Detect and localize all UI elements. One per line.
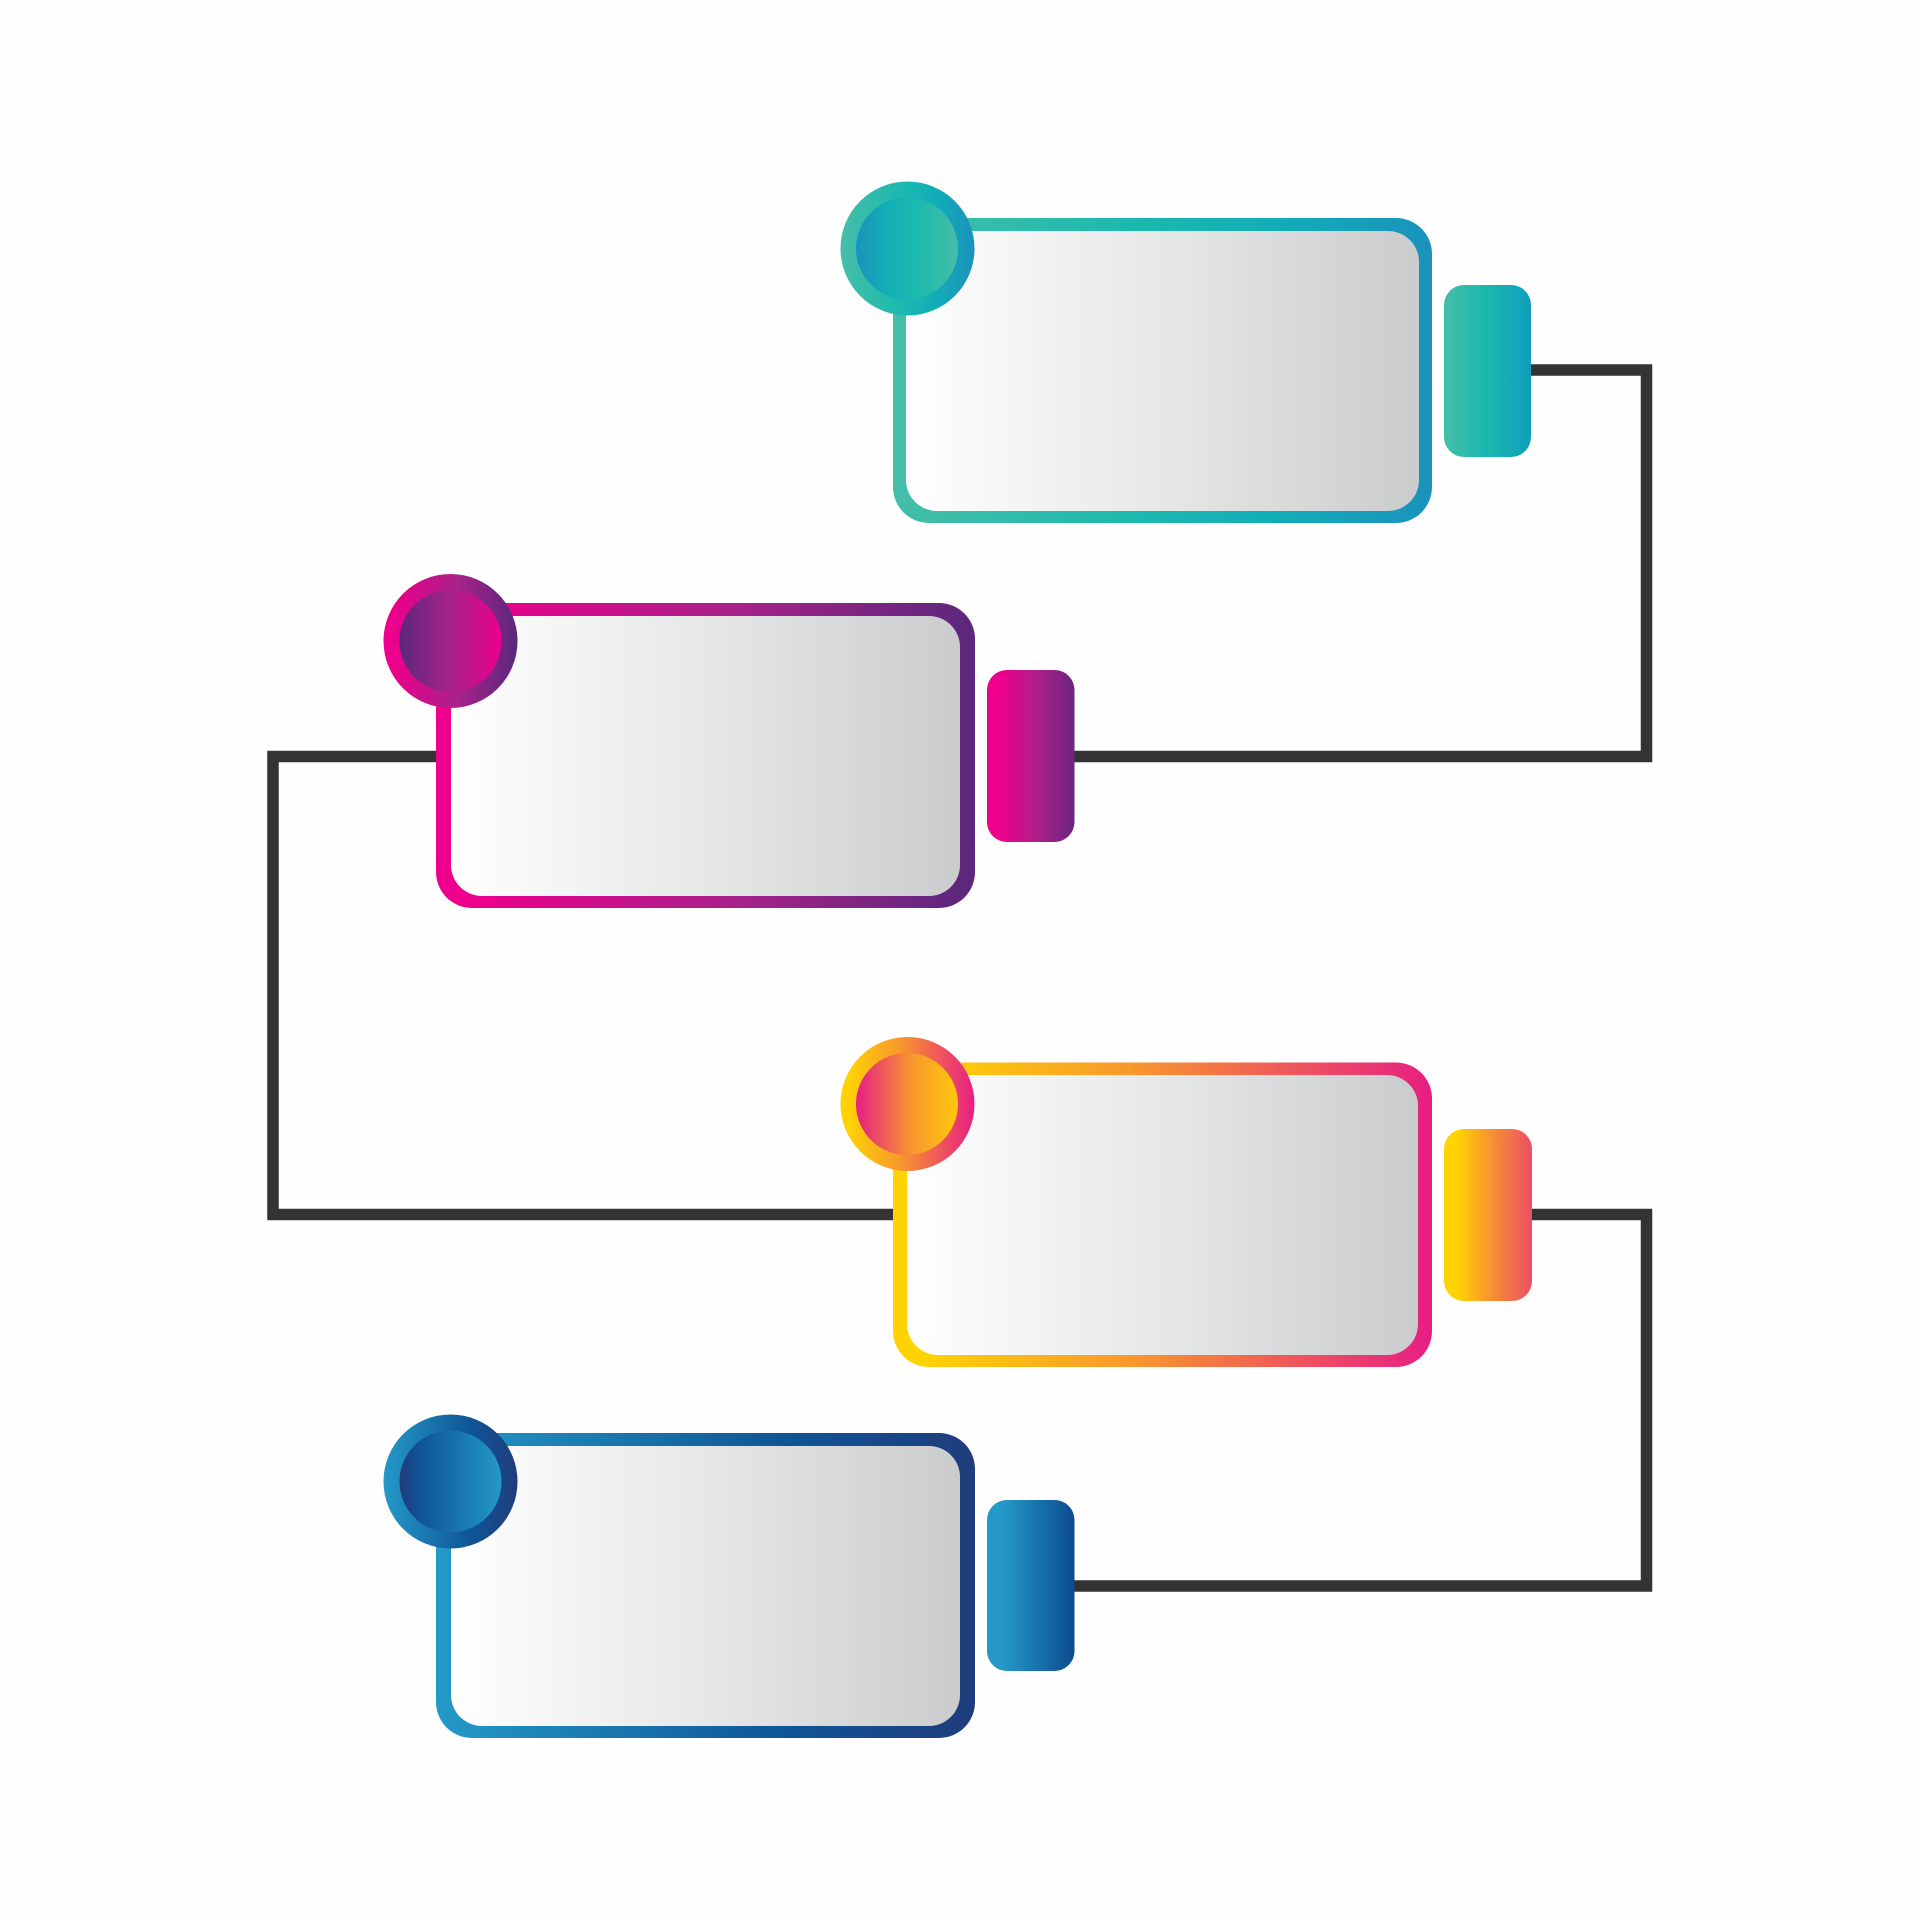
tab: step 3 [1444,1129,1532,1301]
panel: step 2 magenta [384,574,1074,908]
connector lines between steps [273,370,1646,1586]
tab: step 1 [1444,285,1531,457]
tab: step 2 [987,670,1074,842]
panel: step 4 blue [384,1414,1074,1738]
panel: step 3 orange [840,1037,1532,1367]
badge: step 4 [384,1414,518,1548]
panel: step 1 teal [840,182,1531,523]
badge: step 2 [384,574,518,708]
badge: step 3 [840,1037,974,1171]
badge: step 1 [840,182,974,316]
tab: step 4 [987,1500,1074,1671]
